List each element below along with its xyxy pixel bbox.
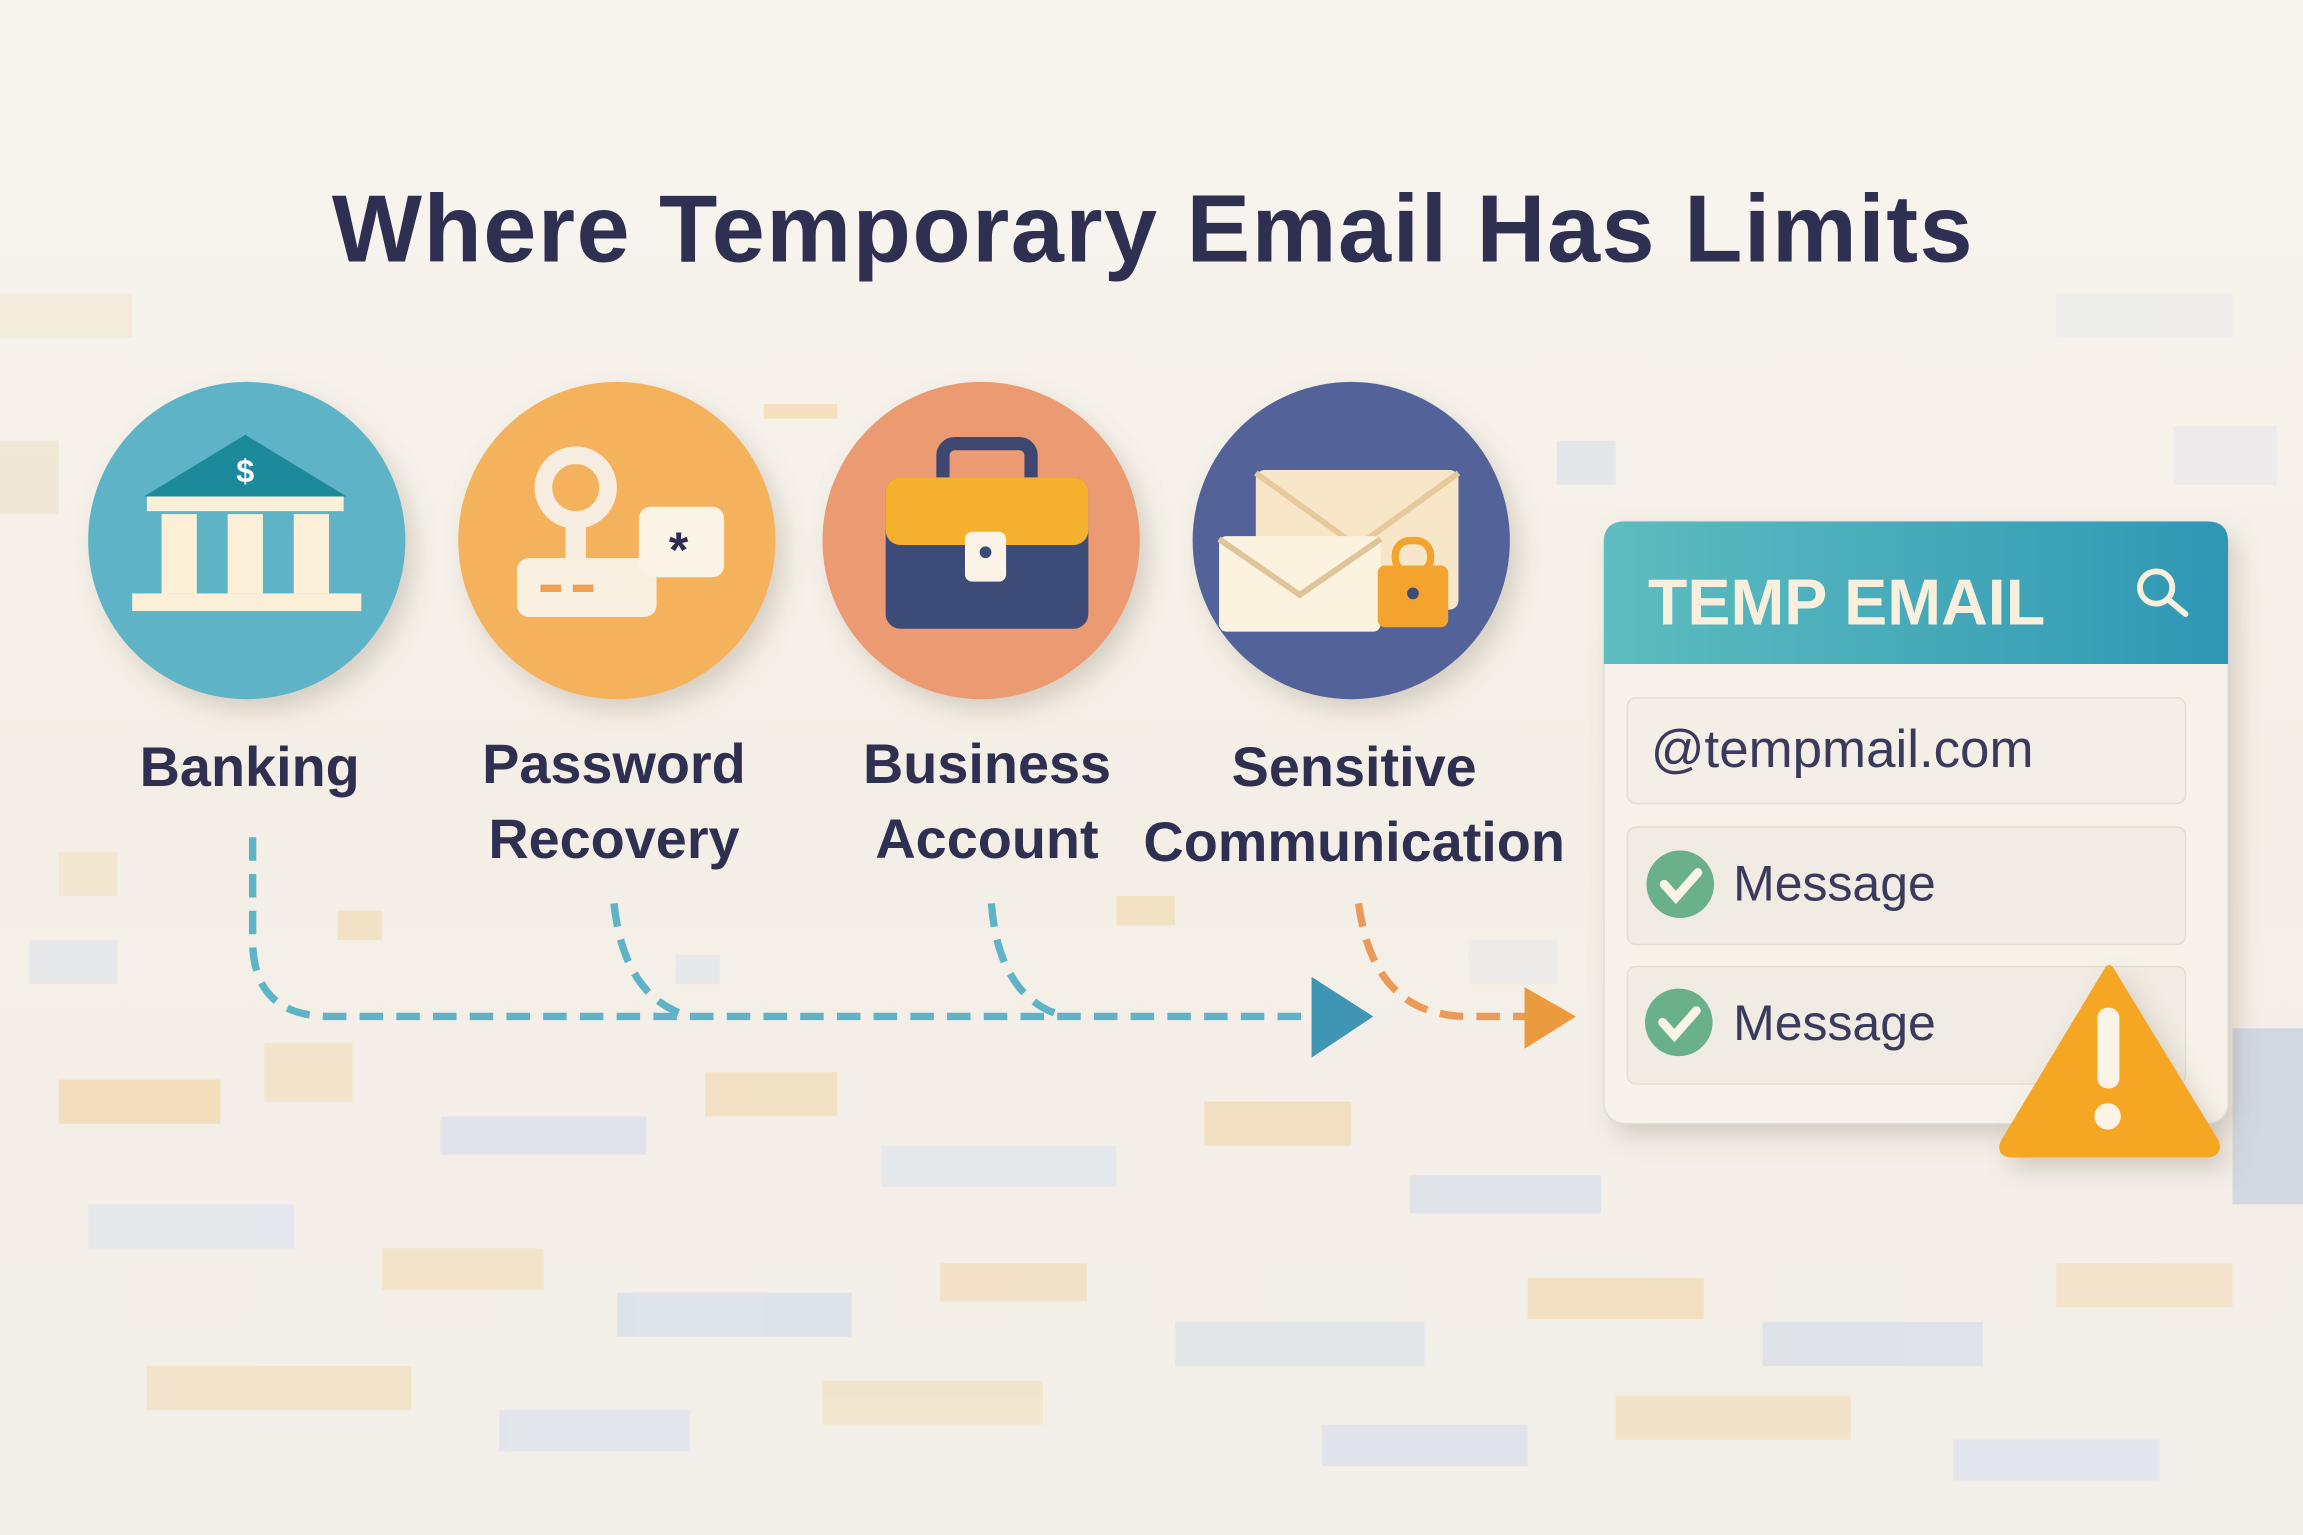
field: address [1627,698,2186,803]
row: message 1: Message [1733,855,1936,911]
icon: password recovery: * [669,522,689,578]
icon: warning [2004,969,2215,1153]
field: address: @tempmail.com [1651,720,2033,779]
icon: password recovery [458,382,776,699]
row: message 2 [1627,967,2186,1084]
panel: temp email [1604,521,2228,1124]
label: password recovery: Recovery [488,807,740,870]
icon: banking [88,382,405,699]
row: message 2: Message [1733,995,1936,1051]
title: Where Temporary Email Has Limits [332,176,1974,282]
label: password recovery: Password [482,732,746,795]
row: message 1 [1627,827,2186,945]
label: sensitive communication: Sensitive [1232,735,1477,798]
label: sensitive communication: Communication [1143,810,1565,873]
panel header [1604,521,2228,664]
icon: business account [822,382,1140,699]
panel header: TEMP EMAIL [1648,566,2045,638]
arrow: dashed flow to warning [253,837,1576,1058]
icon: banking: $ [236,453,254,489]
label: business account: Business [863,732,1111,795]
label: business account: Account [875,807,1099,870]
label: banking: Banking [140,735,360,798]
icon: sensitive communication [1193,382,1510,699]
